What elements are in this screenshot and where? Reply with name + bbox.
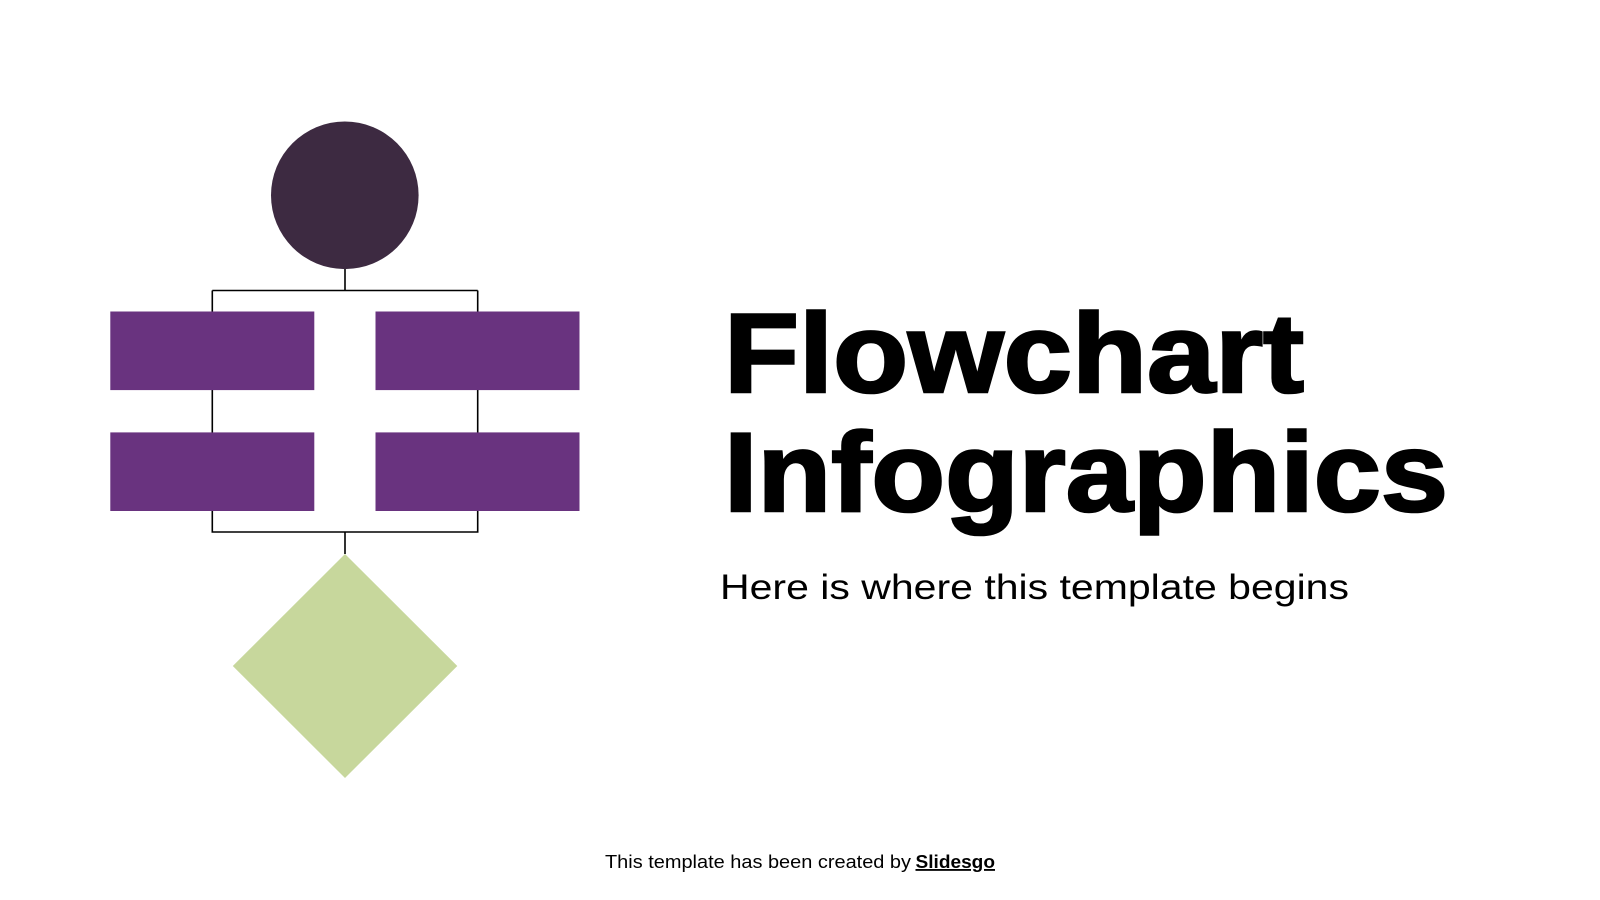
footer credit: Slidesgo (916, 851, 995, 872)
decision diamond (233, 554, 457, 778)
circle node (271, 122, 419, 269)
process box: top left (110, 312, 314, 390)
flowchart diagram (110, 122, 580, 778)
title (724, 291, 1448, 535)
title: Flowchart (724, 291, 1304, 416)
title: Infographics (724, 410, 1448, 535)
process box: bottom right (376, 432, 580, 511)
process box: bottom left (110, 432, 314, 511)
process box: top right (376, 312, 580, 390)
connector lines (212, 268, 478, 554)
footer credit: This template has been created by (605, 851, 912, 872)
subtitle: Here is where this template begins (720, 568, 1349, 607)
